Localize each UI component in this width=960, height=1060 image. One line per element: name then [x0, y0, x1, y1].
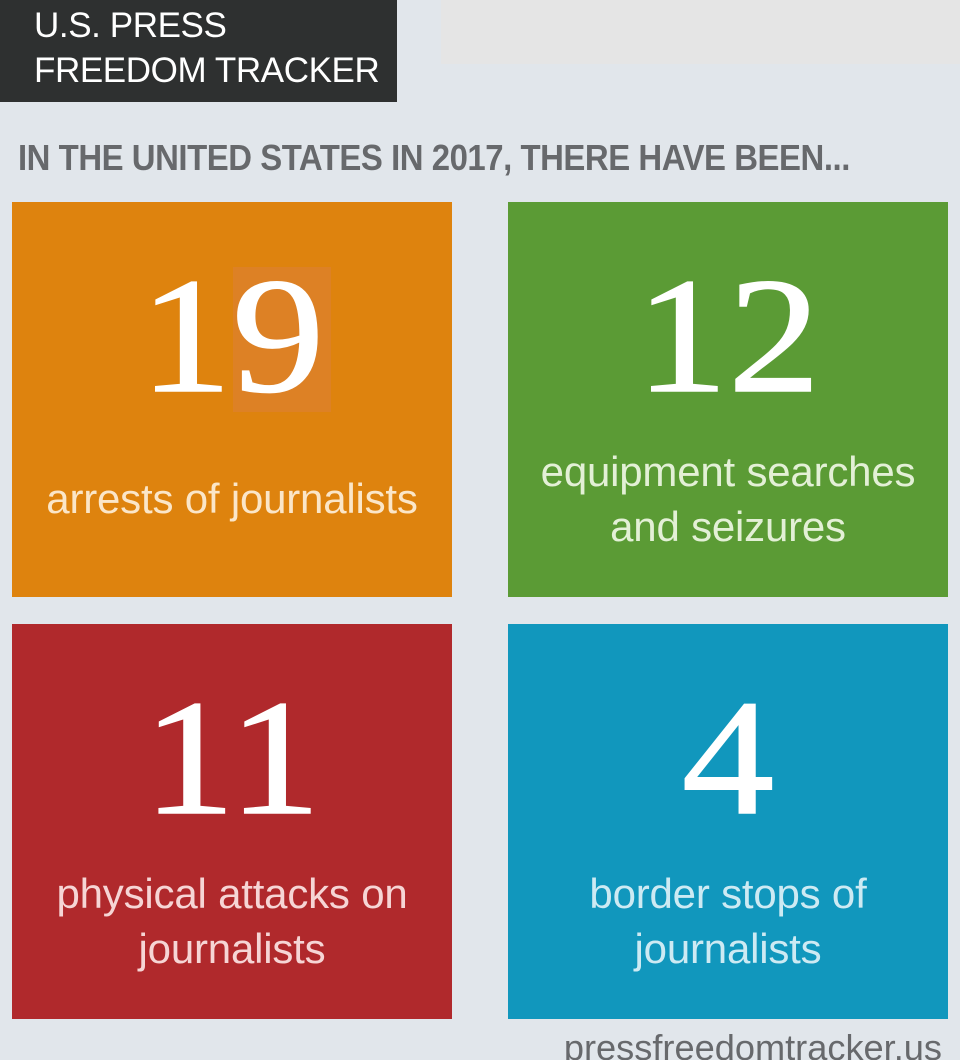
number 11: 11	[143, 666, 321, 849]
panel: arrests	[12, 202, 452, 597]
number 4: 4	[682, 666, 774, 849]
panel: border stops	[508, 624, 948, 1019]
heading: IN THE UNITED STATES IN 2017, THERE HAVE BEEN...	[18, 137, 850, 178]
label: equipment searches	[541, 448, 915, 495]
label	[56, 870, 408, 972]
logo text	[34, 6, 379, 90]
label	[541, 448, 915, 550]
label: journalists	[139, 925, 325, 972]
number 12: 12	[636, 244, 820, 427]
logo block	[0, 0, 397, 102]
number 19: 19	[140, 244, 324, 427]
label: physical attacks on	[56, 870, 408, 917]
highlight behind digit	[233, 267, 331, 412]
panel: equipment	[508, 202, 948, 597]
panel: attacks	[12, 624, 452, 1019]
label	[589, 870, 867, 972]
logo text: FREEDOM TRACKER	[34, 51, 379, 90]
label: arrests of journalists	[46, 475, 418, 522]
label: and seizures	[610, 503, 846, 550]
label: journalists	[635, 925, 821, 972]
top right grey panel	[441, 0, 960, 64]
label: border stops of	[589, 870, 867, 917]
logo text: U.S. PRESS	[34, 6, 226, 45]
